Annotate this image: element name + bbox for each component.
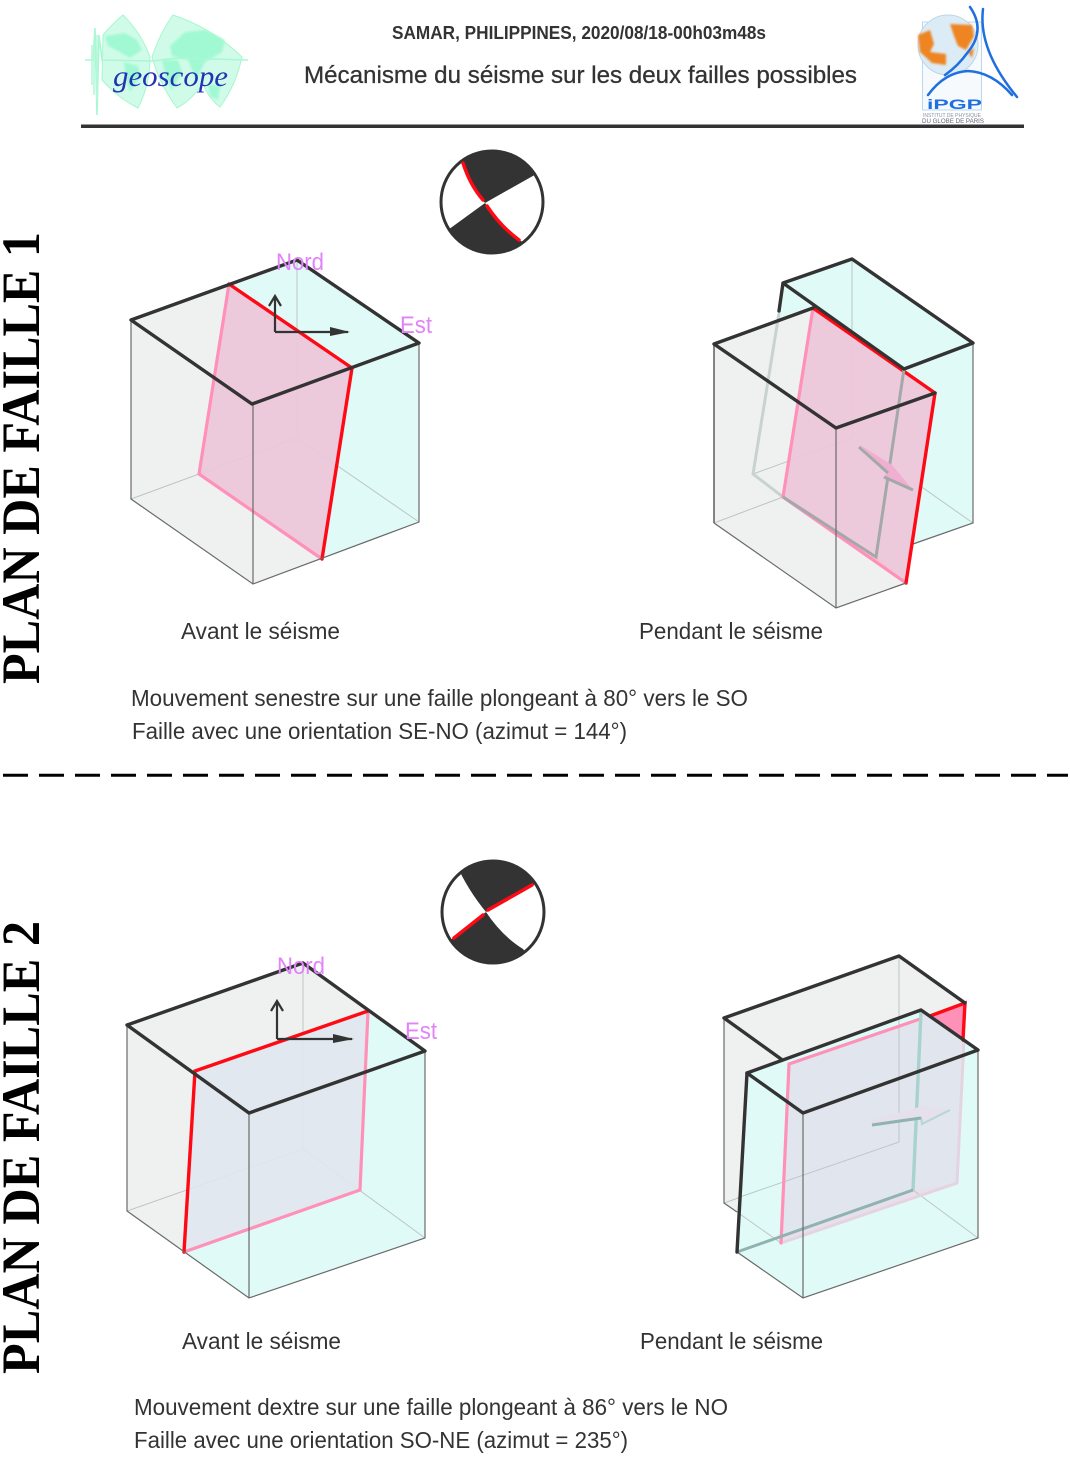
label: avant le seisme: Avant le séisme — [181, 618, 340, 644]
label: pendant le seisme: Pendant le séisme — [639, 618, 823, 644]
label: Nord: Nord — [277, 953, 325, 980]
text: movement description: Mouvement senestre sur une faille plongeant à 80° vers le SO — [131, 685, 748, 711]
label: Est: Est — [405, 1018, 437, 1045]
text: orientation description: Faille avec une orientation SO-NE (azimut = 235°) — [134, 1427, 628, 1453]
arrow: north and east axes — [271, 1001, 354, 1043]
diagram: block before earthquake, fault 2 — [127, 953, 437, 1298]
panel: plan de faille 1 — [0, 130, 973, 744]
logo: geoscope: geoscope — [113, 60, 228, 93]
logo: IPGP: iPGP — [927, 96, 982, 112]
logo: IPGP: INSTITUT DE PHYSIQUE — [923, 113, 981, 119]
icon: focal mechanism 2 — [440, 860, 546, 964]
diagram: block during earthquake, fault 1 — [714, 259, 973, 608]
diagram: block during earthquake, fault 2 — [724, 956, 978, 1298]
arrow: north and east axes — [269, 296, 350, 336]
label: Est: Est — [400, 312, 432, 339]
text: orientation description: Faille avec une orientation SE-NO (azimut = 144°) — [132, 718, 627, 744]
label: pendant le seisme: Pendant le séisme — [640, 1328, 823, 1354]
heading: subtitle: Mécanisme du séisme sur les deux failles possibles — [304, 62, 857, 89]
logo: geoscope — [85, 15, 248, 115]
diagram: block before earthquake, fault 1 — [131, 249, 432, 584]
icon: focal mechanism 1 — [440, 150, 544, 254]
heading: event title: SAMAR, PHILIPPINES, 2020/08/18-00h03m48s — [392, 22, 766, 43]
arrow: slip direction — [859, 445, 913, 490]
logo: IPGP — [918, 7, 1017, 125]
panel: plan de faille 2 — [0, 850, 978, 1453]
label: Nord: Nord — [276, 249, 324, 276]
label: avant le seisme: Avant le séisme — [182, 1328, 341, 1354]
arrow: slip direction — [872, 1106, 950, 1126]
text: movement description: Mouvement dextre sur une faille plongeant à 86° vers le NO — [134, 1394, 728, 1420]
logo: IPGP: DU GLOBE DE PARIS — [922, 119, 984, 125]
